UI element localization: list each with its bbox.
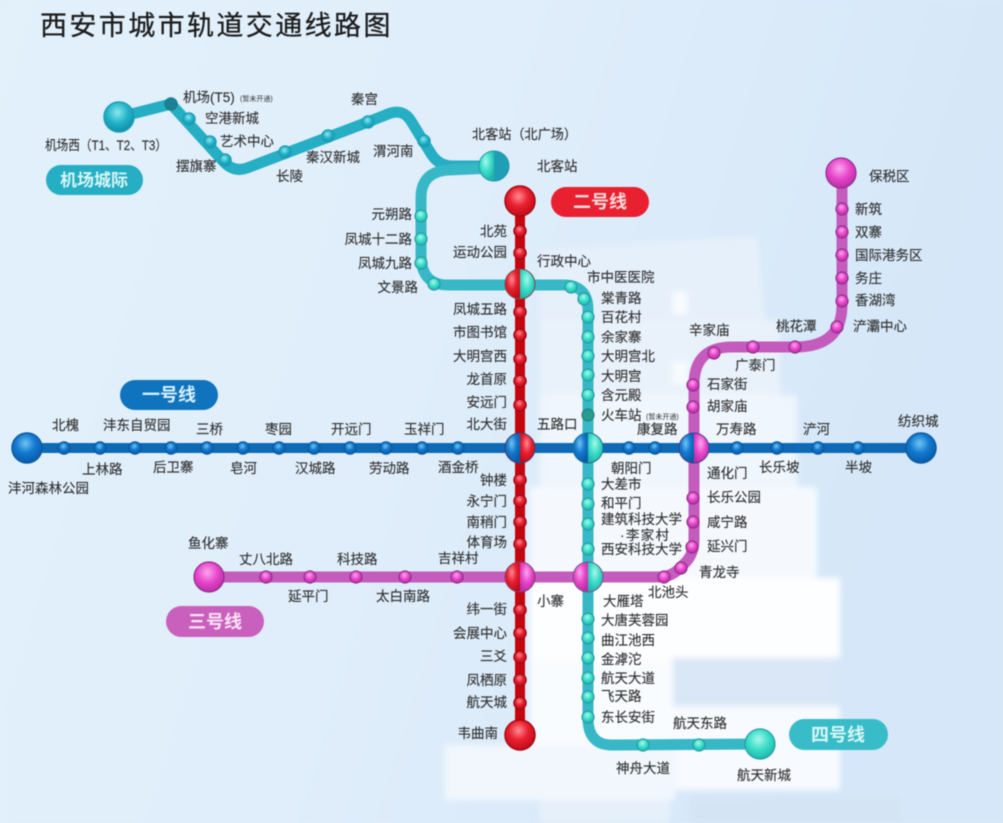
line 4 terminal	[745, 729, 775, 759]
line 4 station labels: 大雁塔	[603, 594, 644, 609]
line 3 station labels: 太白南路	[376, 589, 430, 604]
line 3 station labels: 石家街	[707, 376, 748, 392]
line 1 station labels: 开远门	[331, 422, 372, 437]
line 1 station labels: 长乐坡	[759, 460, 800, 475]
line 3	[166, 158, 922, 637]
line 4 station labels: 棠青路	[601, 291, 642, 306]
line 3 station labels: 长乐公园	[707, 490, 761, 505]
line 4 station labels: 小寨	[537, 593, 564, 609]
line 1 station labels: 皂河	[230, 461, 257, 476]
line 1 station labels: 万寿路	[716, 421, 757, 437]
line 4 station labels: 和平门	[601, 496, 642, 511]
line 1 station labels: 半坡	[845, 460, 872, 475]
line 4 station labels: 西安科技大学	[601, 542, 682, 557]
line 4 station labels: ·李家村	[620, 527, 670, 543]
line 2 station labels: 北大街	[466, 417, 507, 432]
line 4 station labels: 市中医医院	[587, 269, 655, 285]
line 2 station labels: 北苑	[480, 224, 507, 239]
line 4 station labels: (暂未开通)	[646, 412, 679, 421]
line 4 station labels: 凤城九路	[358, 256, 412, 271]
line 3 station labels: 科技路	[337, 552, 378, 567]
airport line station labels	[45, 90, 577, 184]
line 4 station labels: 东长安街	[601, 710, 655, 725]
line 4 station labels: 大明宫北	[601, 349, 655, 364]
line 2 station labels: 运动公园	[453, 245, 507, 260]
line 4 station labels: 元朔路	[372, 207, 412, 222]
line 1 west terminal	[12, 433, 42, 463]
line 2 station labels: 三爻	[480, 649, 507, 664]
track: line 3	[209, 173, 842, 577]
line 1 station labels: 三桥	[196, 422, 223, 437]
airport line station labels: 长陵	[276, 169, 303, 184]
line 2 station labels: 凤栖原	[466, 673, 507, 688]
line 2 station labels: 韦曲南	[458, 726, 498, 741]
airport line station labels: 秦宫	[351, 92, 378, 107]
line 2 station labels: 龙首原	[466, 372, 507, 387]
line 4 station labels: 文景路	[378, 280, 418, 295]
line 1 station labels: 酒金桥	[438, 460, 479, 475]
track: line 4	[421, 168, 760, 745]
line 1 badge	[120, 380, 218, 410]
line 2 badge: 二号线	[573, 192, 627, 212]
line 4 station labels: 含元殿	[601, 388, 642, 403]
interchange: 吉祥村/小寨 west	[505, 562, 535, 592]
airport west terminal	[104, 102, 134, 132]
line 3 station labels: 延兴门	[707, 539, 748, 554]
line 1 station labels: 汉城路	[295, 461, 336, 476]
line 4 station labels: 五路口	[537, 417, 578, 432]
track: line 2	[515, 201, 525, 735]
interchange: 五路口	[573, 433, 603, 463]
interchange: 行政中心	[505, 269, 535, 299]
line 3 station labels: 通化门	[707, 466, 748, 481]
line 3 station labels: 北池头	[648, 585, 688, 600]
background building silhouette	[445, 236, 900, 823]
airport line station labels: 北客站（北广场）	[472, 126, 577, 142]
line 2 station labels: 安远门	[466, 395, 507, 410]
airport line station labels: 空港新城	[205, 111, 259, 126]
line 2 station labels	[453, 224, 507, 741]
line 4 station labels: 建筑科技大学	[601, 512, 682, 527]
line 1 station labels: 浐河	[803, 422, 830, 437]
line 3 station labels: 咸宁路	[707, 514, 748, 530]
line 3 station labels: 国际港务区	[855, 248, 922, 263]
line 1 station labels: 劳动路	[369, 461, 410, 476]
line 3 station labels: 浐灞中心	[853, 319, 907, 334]
line 4 station labels: 飞天路	[601, 689, 642, 704]
title: 西安市城市轨道交通线路图	[40, 11, 393, 41]
line 3 station labels: 双寨	[855, 224, 882, 240]
line 2 station labels: 纬一街	[466, 602, 507, 617]
track: line 1	[27, 443, 921, 453]
line 2 station labels: 钟楼	[480, 472, 507, 488]
line 3 east terminal	[826, 158, 856, 188]
line 1 stations	[58, 442, 864, 454]
line 1 station labels: 纺织城	[898, 414, 939, 429]
line 3 stations	[260, 203, 848, 583]
line 1 east terminal	[906, 433, 936, 463]
airport line badge: 机场城际	[60, 170, 128, 190]
line 3 station labels: 广泰门	[735, 358, 776, 373]
line 2 south terminal	[505, 720, 535, 750]
airport line station labels: 秦汉新城	[306, 150, 360, 165]
line 3 station labels: 香湖湾	[855, 292, 896, 308]
line 3 station labels: 延平门	[288, 589, 328, 604]
line 3 west terminal	[194, 562, 224, 592]
line 2 station labels: 大明宫西	[453, 349, 507, 364]
line 3 station labels: 新筑	[855, 202, 882, 217]
airport line station labels: 机场(T5)	[183, 90, 235, 105]
line 4 station labels: 行政中心	[537, 254, 591, 269]
line 1 station labels: 玉祥门	[404, 422, 444, 437]
line 1 station labels: 康复路	[637, 421, 678, 437]
airport line badge	[46, 165, 143, 195]
line 1 station labels: 沣东自贸园	[103, 418, 170, 433]
line 4 station labels: 金滹沱	[601, 651, 642, 667]
line 4 station labels: 大明宫	[601, 369, 642, 384]
line 4 station labels: 曲江池西	[601, 633, 655, 648]
line 4 station labels: 神舟大道	[616, 761, 670, 776]
line 4 station labels: 大唐芙蓉园	[601, 612, 668, 628]
line 4 station labels: 火车站	[601, 407, 642, 423]
airport line station labels: 摆旗寨	[176, 158, 216, 174]
interchange: 胡家庙/通化门	[679, 433, 709, 463]
line 2 stations	[514, 225, 526, 709]
line 4	[344, 158, 888, 783]
line 3 badge	[166, 606, 264, 637]
line 4 station labels	[344, 158, 791, 783]
line 4 station labels: 百花村	[601, 310, 642, 325]
line 4 station labels: 航天新城	[737, 768, 791, 783]
line 4 stations	[415, 210, 705, 751]
line 3 station labels: 保税区	[869, 169, 910, 184]
line 4 station labels: 北客站	[537, 158, 578, 174]
line 1 badge: 一号线	[142, 385, 196, 405]
line 3 station labels: 吉祥村	[438, 551, 479, 566]
airport line station labels: (暂未开通)	[240, 94, 273, 103]
airport line station labels: 渭河南	[373, 144, 414, 159]
line 1 station labels: 沣河森林公园	[8, 481, 89, 496]
line 1 station labels	[8, 414, 939, 496]
line 2 station labels: 会展中心	[453, 626, 507, 641]
line 1	[8, 380, 939, 496]
line 4 station labels: 航天大道	[601, 671, 655, 686]
line 2 station labels: 南稍门	[466, 515, 507, 530]
line 1 station labels: 上林路	[82, 462, 123, 477]
line 1 station labels: 枣园	[265, 422, 292, 437]
line 4 station labels: 航天东路	[673, 716, 727, 731]
line 2 station labels: 凤城五路	[453, 302, 507, 317]
line 3 station labels: 桃花潭	[776, 319, 816, 334]
line 4 station labels: 凤城十二路	[344, 232, 412, 247]
line 4 badge: 四号线	[811, 725, 865, 745]
line 2	[453, 186, 649, 750]
track: airport line	[120, 104, 494, 169]
line 3 station labels: 青龙寺	[699, 565, 740, 580]
airport line stations	[165, 98, 430, 166]
line 1 station labels: 朝阳门	[611, 461, 652, 476]
interchange: 小寨 east	[573, 562, 603, 592]
line 2 station labels: 航天城	[466, 695, 507, 710]
line 2 station labels: 体育场	[466, 535, 507, 550]
line 4 station labels: 大差市	[601, 476, 642, 492]
line 4 station labels: 余家寨	[601, 329, 642, 345]
line 3 station labels: 鱼化寨	[188, 535, 228, 551]
line 1 station labels: 北槐	[52, 418, 79, 433]
line 3 station labels: 丈八北路	[239, 552, 293, 567]
line 2 station labels: 永宁门	[466, 493, 507, 509]
interchange: 北客站	[479, 151, 509, 181]
line 2 badge	[551, 187, 649, 217]
line 2 station labels: 市图书馆	[453, 324, 507, 340]
line 4 badge	[789, 719, 888, 750]
line 3 badge: 三号线	[188, 612, 242, 632]
line 3 station labels: 胡家庙	[707, 398, 748, 414]
line 3 station labels	[188, 169, 922, 604]
line 3 station labels: 辛家庙	[689, 322, 730, 338]
line 2 north terminal	[505, 186, 535, 216]
line 1 station labels: 后卫寨	[153, 459, 194, 475]
line 3 station labels: 务庄	[855, 270, 882, 286]
airport intercity line	[45, 90, 577, 195]
airport line station labels: 艺术中心	[220, 134, 274, 149]
interchange: 北大街	[505, 433, 535, 463]
airport line station labels: 机场西（T1、T2、T3）	[45, 138, 167, 153]
